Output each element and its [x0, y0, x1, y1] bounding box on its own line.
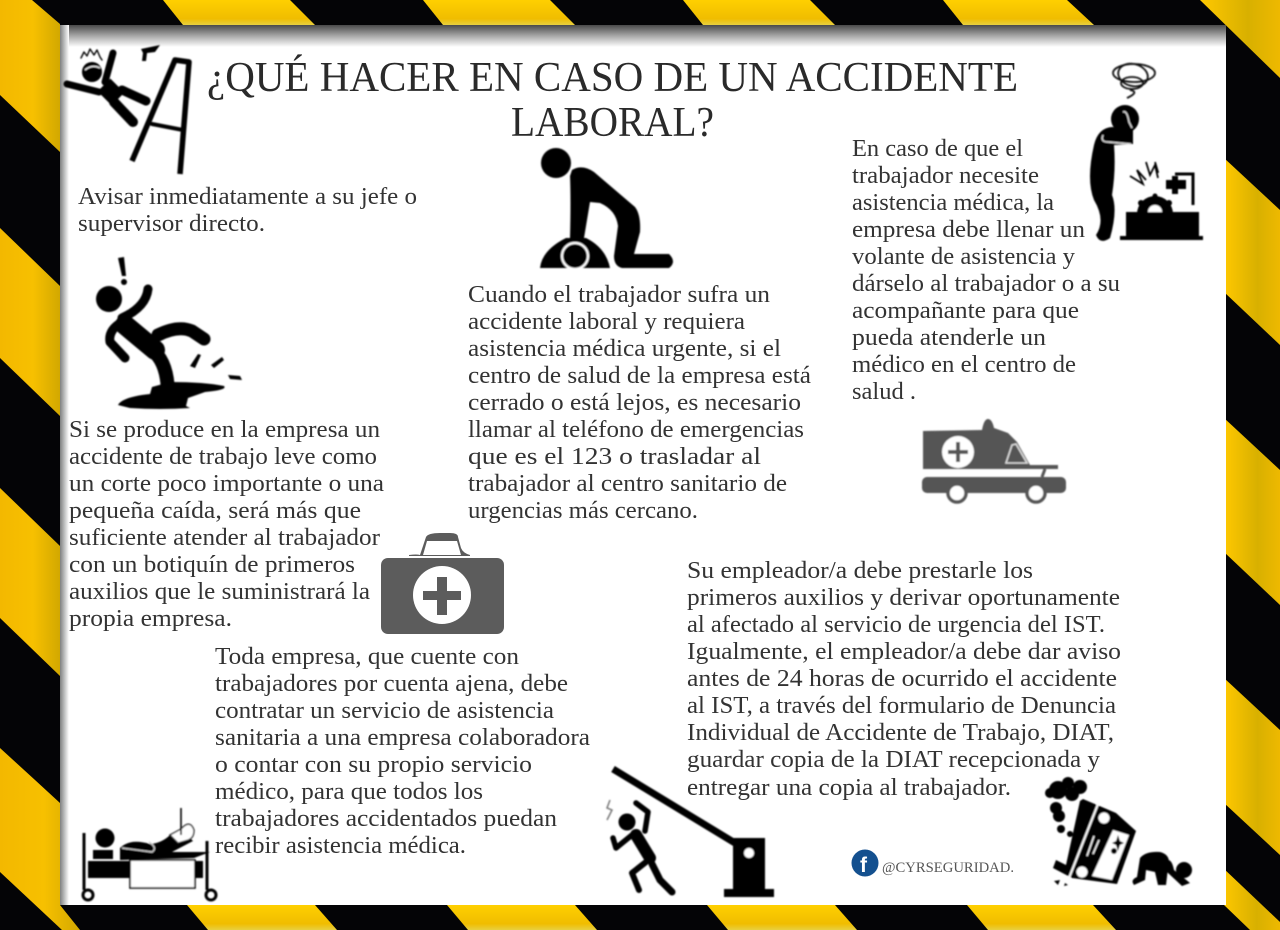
text: asistencia médica urgente	[468, 282, 811, 524]
text: asistencia médica urgente: trabajador al centro sanitario de	[468, 471, 787, 497]
text: toda empresa: recibir asistencia médica.	[215, 833, 466, 859]
text: asistencia médica urgente: Cuando el trabajador sufra un	[468, 282, 770, 308]
text: empleador: al afectado al servicio de urgencia del IST.	[687, 612, 1105, 638]
bottom yellow stripes	[187, 905, 1116, 930]
icon: CPR	[540, 148, 673, 269]
text: asistencia médica urgente: asistencia médica urgente, si el	[468, 336, 781, 362]
text: volante de asistencia: salud .	[852, 379, 916, 405]
title: LABORAL?	[511, 100, 714, 146]
text: toda empresa	[215, 644, 590, 859]
icon: first aid kit	[381, 533, 504, 634]
text: toda empresa: contratar un servicio de asistencia	[215, 698, 554, 724]
text: empleador: antes de 24 horas de ocurrido el accidente	[687, 666, 1117, 692]
text: toda empresa: Toda empresa, que cuente con	[215, 644, 519, 670]
text: asistencia médica urgente: centro de salud de la empresa está	[468, 363, 811, 389]
right yellow stripes	[1200, 0, 1280, 930]
text: accidente leve: Si se produce en la empresa un	[69, 417, 380, 443]
text: accidente leve: propia empresa.	[69, 606, 232, 632]
text: toda empresa: o contar con su propio servicio	[215, 752, 532, 778]
text: volante de asistencia: trabajador necesite	[852, 163, 1039, 189]
icon: worker falling from ladder	[67, 45, 189, 174]
text: asistencia médica urgente: urgencias más cercano.	[468, 498, 698, 524]
facebook handle: f	[860, 854, 868, 877]
text: toda empresa: médico, para que todos los	[215, 779, 483, 805]
text: accidente leve: accidente de trabajo leve como	[69, 444, 377, 470]
title: ¿QUÉ HACER EN CASO DE UN ACCIDENTE	[207, 54, 1018, 101]
icon: slipping worker	[96, 257, 242, 409]
icon: car crash	[1045, 777, 1192, 886]
text: accidente leve: con un botiquín de primeros	[69, 552, 355, 578]
text: empleador	[687, 558, 1121, 801]
facebook handle: @CYRSEGURIDAD.	[882, 860, 1014, 876]
text: volante de asistencia	[852, 136, 1120, 405]
text: volante de asistencia: asistencia médica, la	[852, 190, 1054, 216]
text: asistencia médica urgente: accidente laboral y requiera	[468, 309, 745, 335]
icon: worker hit by barrier	[607, 769, 774, 897]
text: empleador: al IST, a través del formulario de Denuncia	[687, 693, 1116, 719]
title	[207, 54, 1018, 146]
text: volante de asistencia: pueda atenderle un	[852, 325, 1046, 351]
text: avisar: supervisor directo.	[78, 211, 265, 237]
text: empleador: Igualmente, el empleador/a debe dar aviso	[687, 639, 1121, 665]
text: toda empresa: sanitaria a una empresa colaboradora	[215, 725, 590, 751]
text: asistencia médica urgente: que es el 123 o trasladar al	[468, 444, 761, 470]
text: empleador: primeros auxilios y derivar oportunamente	[687, 585, 1120, 611]
text: empleador: Su empleador/a debe prestarle los	[687, 558, 1033, 584]
text: volante de asistencia: acompañante para que	[852, 298, 1079, 324]
left yellow stripes	[0, 0, 80, 930]
icon: injured patient on bed	[83, 808, 216, 900]
text: volante de asistencia: médico en el centro de	[852, 352, 1076, 378]
text: asistencia médica urgente: cerrado o está lejos, es necesario	[468, 390, 801, 416]
icon: dizzy worker at machine	[1090, 60, 1203, 241]
text: empleador: guardar copia de la DIAT recepcionada y	[687, 747, 1100, 773]
text: empleador: Individual de Accidente de Trabajo, DIAT,	[687, 720, 1114, 746]
top yellow stripes	[163, 0, 1094, 25]
text: accidente leve: un corte poco importante o una	[69, 471, 384, 497]
text: avisar: Avisar inmediatamente a su jefe o	[78, 184, 417, 210]
text: accidente leve: suficiente atender al trabajador	[69, 525, 380, 551]
text: avisar	[78, 184, 417, 237]
text: volante de asistencia: dárselo al trabajador o a su	[852, 271, 1120, 297]
text: empleador: entregar una copia al trabajador.	[687, 775, 1011, 801]
text: accidente leve: auxilios que le suministrará la	[69, 579, 370, 605]
text: toda empresa: trabajadores por cuenta ajena, debe	[215, 671, 568, 697]
text: accidente leve	[69, 417, 384, 632]
facebook handle	[852, 850, 1014, 877]
text: toda empresa: trabajadores accidentados puedan	[215, 806, 557, 832]
text: volante de asistencia: empresa debe llenar un	[852, 217, 1085, 243]
text: accidente leve: pequeña caída, será más que	[69, 498, 361, 524]
text: volante de asistencia: volante de asistencia y	[852, 244, 1075, 270]
text: asistencia médica urgente: llamar al teléfono de emergencias	[468, 417, 804, 443]
text: volante de asistencia: En caso de que el	[852, 136, 1023, 162]
icon: ambulance	[922, 419, 1066, 502]
